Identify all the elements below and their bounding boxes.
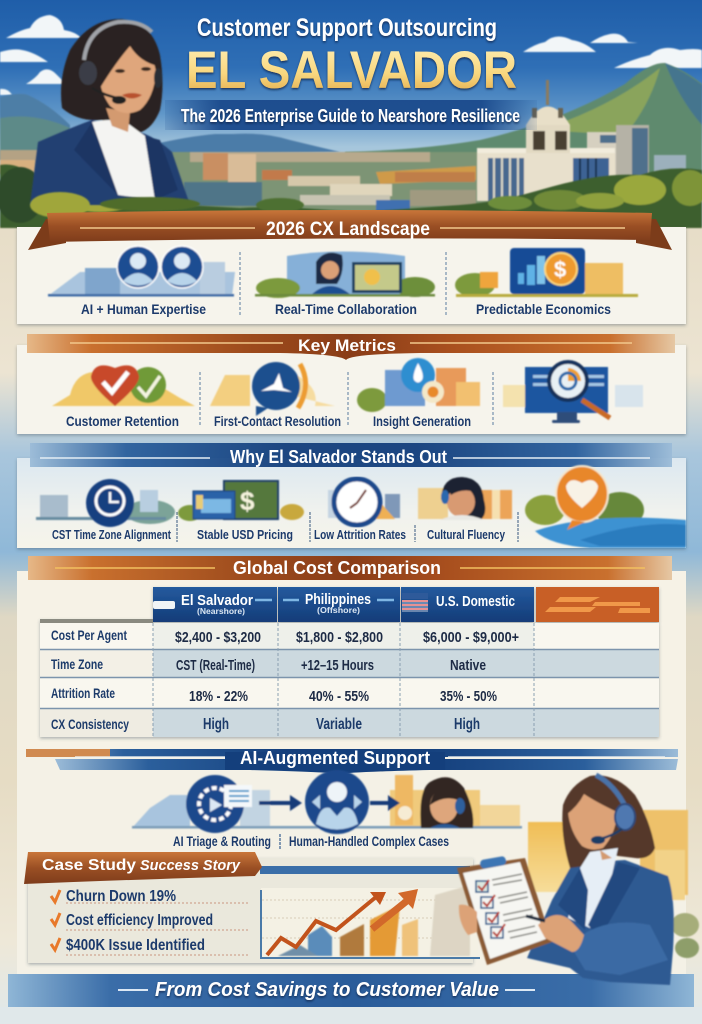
table values: +12–15 Hours	[301, 657, 374, 674]
label: CST Time Zone Alignment	[52, 528, 172, 542]
checklist: $400K Issue Identified	[66, 937, 205, 954]
label: Insight Generation	[373, 414, 471, 429]
table values: CST (Real-Time)	[176, 657, 255, 674]
checklist: Churn Down 19%	[66, 888, 176, 905]
table values: Native	[450, 657, 486, 674]
icon: insight generation	[357, 358, 480, 412]
column headers: (Offshore)	[317, 605, 360, 615]
city	[0, 125, 686, 212]
panel: 2026 CX Landscape	[17, 210, 686, 324]
flag marks and header dashes	[153, 593, 428, 612]
label: Human-Handled Complex Cases	[289, 833, 449, 849]
table values: High	[454, 716, 480, 733]
chart: growth bars and arrows	[261, 885, 480, 958]
icon: predictable economics: $	[554, 257, 566, 282]
panel: Key Metrics	[17, 334, 686, 434]
heading ribbon: Why El Salvador Stands Out: Why El Salvador Stands Out	[230, 447, 447, 467]
icon: customer retention	[52, 365, 195, 406]
heading ribbon: AI-Augmented Support: AI-Augmented Support	[240, 747, 430, 768]
heading ribbon: 2026 CX Landscape	[28, 210, 672, 250]
panel: Why El Salvador Stands Out	[17, 443, 686, 548]
row labels: Cost Per Agent	[51, 627, 127, 643]
row labels: CX Consistency	[51, 716, 129, 732]
column headers: Philippines	[305, 591, 371, 608]
column headers: (Nearshore)	[197, 606, 245, 616]
table values: $1,800 - $2,800	[296, 629, 383, 646]
mountains	[0, 63, 702, 175]
label: AI Triage & Routing	[173, 833, 271, 849]
blue rule	[260, 866, 470, 874]
foliage in front of agent	[30, 192, 200, 218]
label: First-Contact Resolution	[214, 414, 341, 429]
label: AI + Human Expertise	[81, 301, 206, 317]
icon: predictable economics	[455, 248, 638, 297]
row labels: Time Zone	[51, 656, 103, 672]
table values: 18% - 22%	[189, 688, 248, 705]
icon: real-time collaboration	[255, 252, 435, 298]
panel: case study	[24, 852, 480, 963]
label: Customer Retention	[66, 414, 179, 429]
clouds	[0, 15, 702, 95]
table values: 35% - 50%	[440, 688, 497, 705]
table values: Variable	[316, 716, 362, 733]
icon: USD pricing: $	[240, 486, 255, 516]
icon: clock, time zone	[36, 479, 175, 527]
heading ribbon: Global Cost Comparison: Global Cost Comparison	[233, 558, 441, 578]
closing tagline: From Cost Savings to Customer Value	[155, 979, 499, 1001]
panel: Global Cost Comparison	[17, 556, 686, 751]
label: Stable USD Pricing	[197, 527, 293, 542]
footer band	[0, 974, 702, 1024]
table values: $2,400 - $3,200	[175, 629, 261, 646]
row labels: Attrition Rate	[51, 685, 115, 701]
checklist	[51, 888, 248, 955]
heading ribbon: Why El Salvador Stands Out	[30, 443, 672, 467]
title line 1: Customer Support Outsourcing	[197, 14, 497, 42]
label: Low Attrition Rates	[314, 527, 406, 542]
icon: beach heart pin	[525, 466, 686, 548]
case study ribbon: Success Story	[140, 857, 241, 874]
heading ribbon: Key Metrics: Key Metrics	[298, 336, 396, 355]
header illustration: sky, mountains, city and agent	[0, 0, 702, 228]
icon: wall clock, attrition	[328, 479, 400, 525]
title band	[165, 100, 537, 130]
icon: analytics magnifier	[503, 362, 643, 423]
icon: AI + human	[48, 246, 235, 296]
page background	[0, 210, 702, 1024]
label: Predictable Economics	[476, 301, 611, 317]
main title: EL SALVADOR	[186, 41, 517, 100]
table values: 40% - 55%	[309, 688, 369, 705]
trees	[0, 165, 702, 228]
heading ribbon: 2026 CX Landscape: 2026 CX Landscape	[266, 219, 430, 240]
icon: cultural fluency agent	[418, 477, 512, 520]
heading ribbon: Global Cost Comparison	[28, 556, 672, 580]
table values: High	[203, 716, 229, 733]
agent portrait	[30, 19, 190, 205]
label: Cultural Fluency	[427, 527, 506, 542]
heading ribbon: Key Metrics	[27, 334, 675, 360]
checklist: Cost efficiency Improved	[66, 912, 213, 929]
column headers: El Salvador	[181, 592, 253, 609]
row labels	[51, 627, 129, 732]
column headers: U.S. Domestic	[436, 593, 515, 610]
panel: AI-Augmented Support	[17, 747, 686, 974]
table values: $6,000 - $9,000+	[423, 629, 519, 646]
heading ribbon: AI-Augmented Support	[26, 747, 678, 774]
flow graphic: AI to human	[132, 770, 522, 834]
icon: first-contact resolution	[210, 362, 335, 416]
case study ribbon: Case Study	[42, 857, 136, 874]
icon: USD pricing	[178, 481, 304, 521]
agent with clipboard	[457, 775, 699, 985]
table values	[175, 629, 519, 733]
government building	[477, 80, 615, 202]
case study ribbon	[24, 852, 262, 884]
subtitle: The 2026 Enterprise Guide to Nearshore Resilience	[181, 106, 520, 126]
comparison table	[40, 587, 659, 737]
column headers	[181, 591, 515, 616]
label: Real-Time Collaboration	[275, 301, 417, 317]
